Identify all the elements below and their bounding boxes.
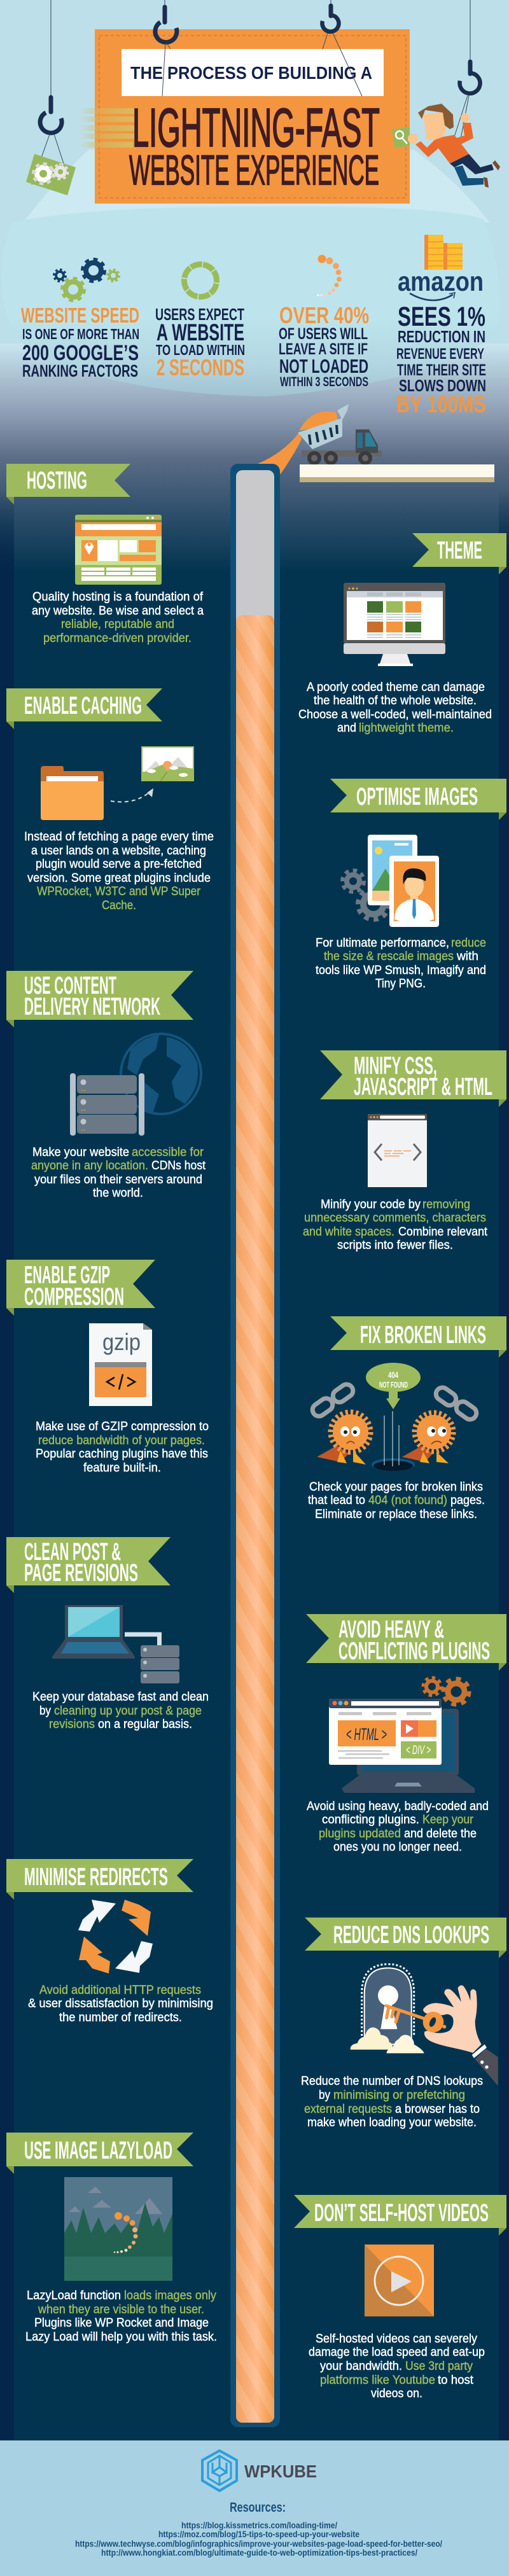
text: and	[337, 721, 356, 735]
text	[31, 1145, 206, 1200]
text: plugin would serve a pre-fetched	[36, 857, 202, 871]
banner	[412, 533, 506, 574]
icon: globe	[121, 1034, 201, 1114]
icon: picture	[141, 746, 194, 781]
banner: CLEAN POST &	[24, 1538, 121, 1566]
text: Plugins like WP Rocket and Image	[34, 2316, 209, 2330]
banner	[6, 1260, 155, 1316]
progress tube	[230, 464, 280, 2427]
icon: plugin gears	[423, 1678, 469, 1704]
icon: laptop with browser	[329, 1699, 475, 1793]
text: For ultimate performance,	[316, 936, 449, 950]
text: external requests	[304, 2102, 392, 2116]
text: Popular caching plugins have this	[36, 1447, 208, 1461]
text: and white spaces.	[303, 1225, 394, 1239]
panel: gzip compression	[6, 1260, 209, 1475]
banner: DELIVERY NETWORK	[24, 993, 160, 1020]
text: pages.	[450, 1493, 485, 1507]
icon: gears	[54, 260, 119, 300]
text: a user lands on a website, caching	[31, 844, 206, 858]
text	[28, 1983, 213, 2024]
text: Reduce the number of DNS lookups	[301, 2074, 483, 2088]
banner	[306, 1614, 506, 1671]
text: CDNs host	[151, 1159, 206, 1173]
tipper bucket	[298, 404, 349, 449]
text: your files on their servers around	[34, 1173, 202, 1187]
text: Cache.	[102, 898, 136, 912]
text: the world.	[93, 1186, 143, 1200]
text	[279, 302, 369, 389]
text: Keep your	[422, 1813, 473, 1827]
text: Instead of fetching a page every time	[24, 830, 214, 844]
text: plugins updated	[319, 1827, 401, 1841]
text: the number of redirects.	[59, 2010, 182, 2024]
dump truck	[258, 404, 494, 482]
text: Use 3rd party	[405, 2359, 473, 2373]
text: USERS EXPECT	[155, 305, 244, 324]
text: version. Some great plugins include	[27, 871, 211, 885]
text: make when loading your website.	[307, 2115, 477, 2129]
text: accessible for	[132, 1145, 204, 1159]
text	[155, 305, 245, 380]
text: Combine relevant	[398, 1225, 488, 1239]
panel: minify	[303, 1050, 506, 1252]
hero header	[26, 0, 500, 204]
text	[32, 1690, 209, 1731]
text	[25, 2288, 217, 2344]
text	[298, 680, 492, 735]
text: tools like WP Smush, Imagify and	[316, 963, 486, 977]
text: when they are visible to the user.	[38, 2302, 204, 2316]
text: your bandwidth.	[320, 2359, 402, 2373]
icon: gzip file: gzip	[102, 1329, 141, 1355]
icon: folder	[41, 766, 104, 820]
text: Avoid additional HTTP requests	[39, 1983, 201, 1997]
icon: video play	[365, 2245, 434, 2316]
banner: MINIFY CSS,	[354, 1052, 437, 1080]
text: unnecessary comments, characters	[304, 1211, 486, 1225]
sand stream	[258, 433, 302, 474]
text: with	[456, 949, 478, 963]
text: LEAVE A SITE IF	[279, 340, 368, 358]
text	[316, 936, 486, 991]
text: Make use of GZIP compression to	[36, 1419, 209, 1433]
wpkube logo: WPKUBE	[244, 2461, 317, 2481]
text	[21, 303, 139, 380]
text	[308, 1480, 485, 1521]
text: Self-hosted videos can severely	[316, 2332, 477, 2346]
banner	[6, 464, 130, 505]
panel: hosting	[6, 464, 204, 645]
panel: content delivery network	[6, 971, 206, 1200]
panel: image lazyload	[6, 2133, 217, 2344]
banner	[330, 779, 506, 820]
text: lightweight theme.	[359, 721, 454, 735]
text: & user dissatisfaction by minimising	[28, 1996, 213, 2010]
icon: laptop and database	[52, 1605, 179, 1683]
banner	[6, 2133, 193, 2174]
text: BY 100MS	[396, 391, 486, 417]
icon: coin stacks	[424, 235, 463, 270]
resources links: https://blog.kissmetrics.com/loading-time/	[181, 2520, 337, 2530]
text: that lead to	[308, 1493, 365, 1507]
text: A poorly coded theme can damage	[307, 680, 485, 694]
text: videos on.	[371, 2386, 422, 2400]
panel: fix broken links	[308, 1316, 506, 1521]
arrow: dashed	[111, 788, 153, 802]
text: performance-driven provider.	[43, 631, 192, 645]
text	[309, 2332, 485, 2400]
text: OVER 40%	[279, 302, 369, 328]
resources links: https://www.techwyse.com/blog/infographics/improve-your-websites-page-load-speed-for-better-seo/	[75, 2538, 442, 2549]
icon: forest image with loader	[64, 2177, 172, 2281]
banner	[6, 1859, 193, 1900]
banner: ENABLE GZIP	[24, 1262, 110, 1289]
banner	[305, 1918, 506, 1958]
text: the health of the whole website.	[314, 693, 477, 707]
resources links: https://moz.com/blog/15-tips-to-speed-up-your-website	[158, 2529, 359, 2539]
text	[396, 302, 486, 417]
text: 200 GOOGLE’S	[22, 341, 139, 365]
icon: man with card	[392, 104, 500, 188]
banner	[6, 688, 162, 729]
hanging card with gears	[26, 154, 76, 195]
banner: USE CONTENT	[24, 972, 116, 999]
crane hooks	[32, 0, 480, 184]
text: to host	[438, 2373, 474, 2387]
text: on a regular basis.	[98, 1717, 192, 1731]
text: Tiny PNG.	[375, 977, 426, 991]
panel: optimise images	[316, 779, 506, 991]
banner: MINIMISE REDIRECTS	[24, 1863, 168, 1891]
text: OF USERS WILL	[279, 325, 368, 343]
text: loads images only	[124, 2288, 216, 2302]
banner: ENABLE CACHING	[24, 692, 142, 720]
icon: door keyhole and hand	[351, 1964, 498, 2085]
text: Quality hosting is a foundation of	[32, 590, 204, 604]
text: Check your pages for broken links	[309, 1480, 483, 1494]
title card	[80, 29, 410, 204]
text: platforms like Youtube	[320, 2373, 435, 2387]
panel: avoid heavy plugins	[306, 1614, 506, 1854]
text: reduce bandwidth of your pages.	[38, 1433, 205, 1447]
banner: PAGE REVISIONS	[24, 1559, 138, 1587]
title line 1: THE PROCESS OF BUILDING A	[130, 63, 372, 83]
text	[36, 1419, 209, 1475]
icon: photos and gears	[342, 835, 439, 927]
text: RANKING FACTORS	[22, 361, 138, 380]
text: and delete the	[404, 1827, 477, 1841]
icon: sad monsters and hole	[317, 1411, 453, 1471]
text: feature built-in.	[83, 1461, 161, 1475]
text	[32, 590, 204, 645]
text: TO LOAD WITHIN	[156, 342, 245, 358]
text	[303, 1197, 488, 1252]
text: Keep your database fast and clean	[32, 1690, 209, 1704]
wpkube logo	[202, 2451, 317, 2491]
text: A WEBSITE	[157, 319, 244, 345]
text: Make your website	[32, 1145, 129, 1159]
text: Avoid using heavy, badly-coded and	[307, 1799, 489, 1813]
text: any website. Be wise and select a	[32, 604, 204, 618]
text: Choose a well-coded, well-maintained	[298, 707, 492, 721]
text: IS ONE OF MORE THAN	[22, 326, 139, 342]
icon: 404 speech bubble	[366, 1363, 421, 1409]
text: damage the load speed and eat-up	[309, 2345, 485, 2359]
icon: redirect arrows	[78, 1900, 153, 1974]
icon: gzip file	[89, 1323, 152, 1406]
text: by	[319, 2088, 330, 2102]
banner: HOSTING	[27, 467, 87, 494]
text: WPRocket, W3TC and WP Super	[37, 884, 200, 898]
icon: code document	[368, 1114, 427, 1187]
panel: minimise redirects	[6, 1859, 213, 2024]
text: Minify your code by	[321, 1197, 421, 1211]
banner	[6, 1537, 171, 1593]
text: Lazy Load will help you with this task.	[25, 2330, 217, 2344]
text: LazyLoad function	[27, 2288, 121, 2302]
text: the size & rescale images	[324, 949, 454, 963]
text: NOT LOADED	[279, 355, 368, 377]
icon: laptop with browser: < DIV >	[406, 1744, 431, 1757]
icon: broken chains	[310, 1382, 479, 1422]
banner	[320, 1050, 506, 1107]
panel: enable caching	[6, 688, 214, 912]
icon: server rack	[70, 1073, 144, 1136]
text: removing	[422, 1197, 470, 1211]
stat: over 40 percent	[279, 254, 369, 389]
text: minimising or prefetching	[333, 2088, 465, 2102]
text: reliable, reputable and	[61, 617, 174, 631]
resources links: http://www.hongkiat.com/blog/ultimate-guide-to-web-optimization-tips-best-practices/	[101, 2547, 417, 2558]
text: reduce	[451, 936, 486, 950]
truck body	[302, 429, 382, 465]
text: Eliminate or replace these links.	[315, 1507, 477, 1521]
text: anyone in any location.	[31, 1159, 148, 1173]
banner: COMPRESSION	[24, 1283, 124, 1311]
text: by	[39, 1704, 51, 1718]
banner	[330, 1316, 506, 1358]
resources links	[75, 2520, 442, 2558]
icon: monitor	[344, 583, 445, 666]
panel: reduce dns lookups	[301, 1918, 506, 2129]
text	[24, 830, 214, 912]
banner: USE IMAGE LAZYLOAD	[24, 2137, 172, 2164]
text: cleaning up your post & page	[54, 1704, 202, 1718]
text: revisions	[49, 1717, 95, 1731]
text: WITHIN 3 SECONDS	[280, 375, 368, 389]
stat: website speed	[21, 260, 139, 380]
icon: laptop with browser: < HTML >	[346, 1725, 387, 1744]
icon: loading dots	[317, 254, 342, 296]
text: a browser has to	[395, 2102, 480, 2116]
text: 2 SECONDS	[157, 354, 244, 380]
icon: web page	[75, 515, 162, 585]
text: conflicting plugins.	[322, 1813, 419, 1827]
text	[307, 1799, 489, 1854]
stat: two seconds	[155, 265, 245, 380]
amazon logo: amazon	[398, 267, 484, 297]
icon: 404 speech bubble: 404	[388, 1370, 398, 1380]
text: ones you no longer need.	[333, 1840, 462, 1854]
resources heading: Resources:	[230, 2500, 286, 2515]
road platform	[300, 464, 494, 482]
banner	[6, 971, 193, 1027]
icon: loading ring	[185, 265, 216, 296]
panel: clean post revisions	[6, 1537, 209, 1731]
text: 404 (not found)	[368, 1493, 447, 1507]
panel: theme	[298, 533, 506, 735]
panel: self-hosted videos	[294, 2195, 506, 2400]
banner	[294, 2195, 506, 2236]
text	[301, 2074, 483, 2129]
icon: 404 speech bubble: NOT FOUND	[379, 1380, 408, 1389]
text: WEBSITE SPEED	[21, 303, 139, 327]
footer	[0, 2440, 509, 2576]
text: scripts into fewer files.	[337, 1238, 453, 1252]
stat: amazon	[396, 235, 486, 417]
